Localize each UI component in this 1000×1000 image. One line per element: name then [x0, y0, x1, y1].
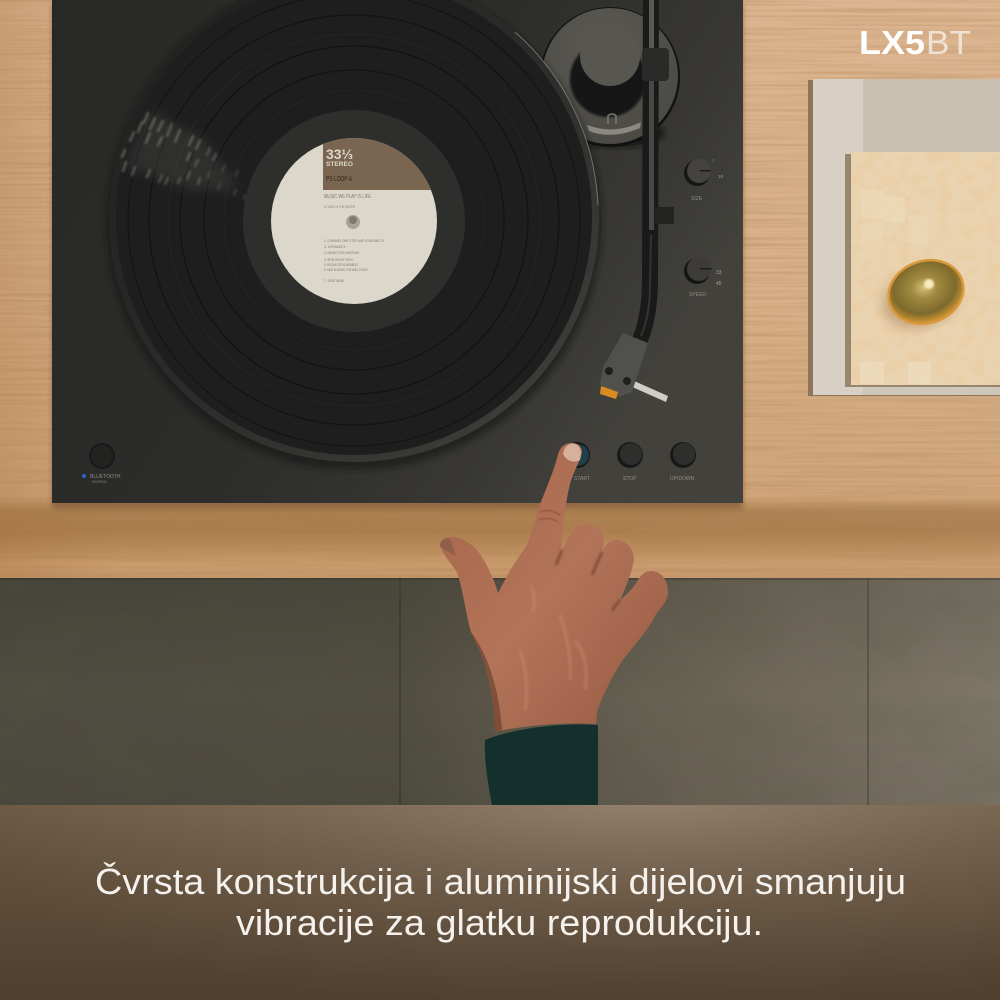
- textured stone book: [845, 152, 1000, 387]
- knuckle crease: [538, 511, 560, 522]
- size knob: 10: [718, 174, 724, 179]
- label track list: [324, 239, 384, 283]
- spindle: [346, 215, 360, 229]
- label track list: 3. MUSIC FOR WAITING: [324, 251, 359, 255]
- label stereo text: STEREO: [326, 162, 353, 168]
- label side text: PS LOOP A: [326, 176, 352, 183]
- finger lift: [630, 380, 668, 402]
- label track list: 7. SIDE NOW: [324, 279, 345, 283]
- caption text: vibracije za glatku reprodukciju.: [236, 902, 763, 943]
- record label: [271, 135, 441, 304]
- label brown block: [323, 138, 431, 190]
- arm collar: [642, 48, 669, 81]
- logo: LX5BT: LX5: [859, 24, 925, 61]
- hand shape: [440, 443, 668, 732]
- label track list: 6. SIDE B MUSIC THE WAX TODAY: [324, 268, 368, 272]
- headshell body: [600, 333, 648, 398]
- speed knob: 33: [716, 270, 722, 276]
- fingernail: [563, 443, 581, 462]
- tonearm: [640, 0, 674, 340]
- vinyl record: [106, 0, 602, 470]
- up/down button: UP/DOWN: [670, 476, 695, 482]
- hand shadow side: [471, 632, 502, 732]
- stop button: [617, 442, 643, 482]
- turntable plinth: [52, 0, 743, 509]
- caption band: [0, 805, 1000, 1000]
- bluetooth button: BLUETOOTH: [90, 474, 121, 480]
- lift arc: [587, 114, 641, 135]
- logo: LX5BT: BT: [926, 24, 971, 61]
- counterweight shadow: [568, 51, 643, 118]
- caption text: Čvrsta konstrukcija i aluminijski dijelovi smanjuju: [95, 861, 906, 902]
- label track list: 5. ROOM FOR A MOMENT: [324, 263, 359, 267]
- start button: [564, 442, 590, 482]
- logo: LX5BT: [859, 24, 971, 61]
- thumb nail: [440, 538, 456, 556]
- size knob: [684, 158, 724, 202]
- speed knob: 45: [716, 281, 722, 287]
- size knob: 7: [712, 158, 715, 163]
- sleeve: [485, 724, 598, 805]
- label track list: 1. CHANNEL ONE STEP AND YOUR MELT II: [324, 239, 384, 243]
- label track list: 2. INTIMACY: [324, 245, 347, 249]
- label track list: 4. SPIN ON MY VINYL: [324, 258, 354, 262]
- orange stylus: [600, 386, 618, 399]
- counterweight disc: [540, 7, 680, 147]
- large pale book: [808, 79, 1000, 396]
- label artist: AT WAX IN THE WATER: [324, 204, 355, 209]
- hand pressing start: [440, 443, 668, 805]
- speed knob: [684, 257, 722, 298]
- start button: START: [574, 476, 590, 482]
- concrete floor tiles: [0, 578, 1000, 806]
- vinyl light reflection: [122, 113, 245, 199]
- label album title: MUSIC WE PLAY IS LIFE: [324, 194, 371, 200]
- size knob: SIZE: [691, 196, 703, 202]
- up/down button: [670, 442, 696, 482]
- bluetooth button: PAIRING: [92, 480, 107, 484]
- counterweight knob: [580, 40, 640, 86]
- speed knob: SPEED: [689, 292, 706, 298]
- bluetooth button: [82, 443, 121, 484]
- stop button: STOP: [623, 476, 637, 482]
- gold egg: [875, 251, 972, 337]
- wooden tabletop: [0, 0, 1000, 578]
- headshell and cartridge: [600, 333, 668, 402]
- book stack with gold egg: [808, 79, 1000, 396]
- arm clip: [655, 207, 674, 224]
- label speed text: 33⅓: [326, 146, 353, 162]
- hand veins: [520, 585, 586, 710]
- finger gaps: [556, 550, 620, 610]
- caption text: [95, 861, 906, 943]
- record centre dead wax: [243, 110, 465, 332]
